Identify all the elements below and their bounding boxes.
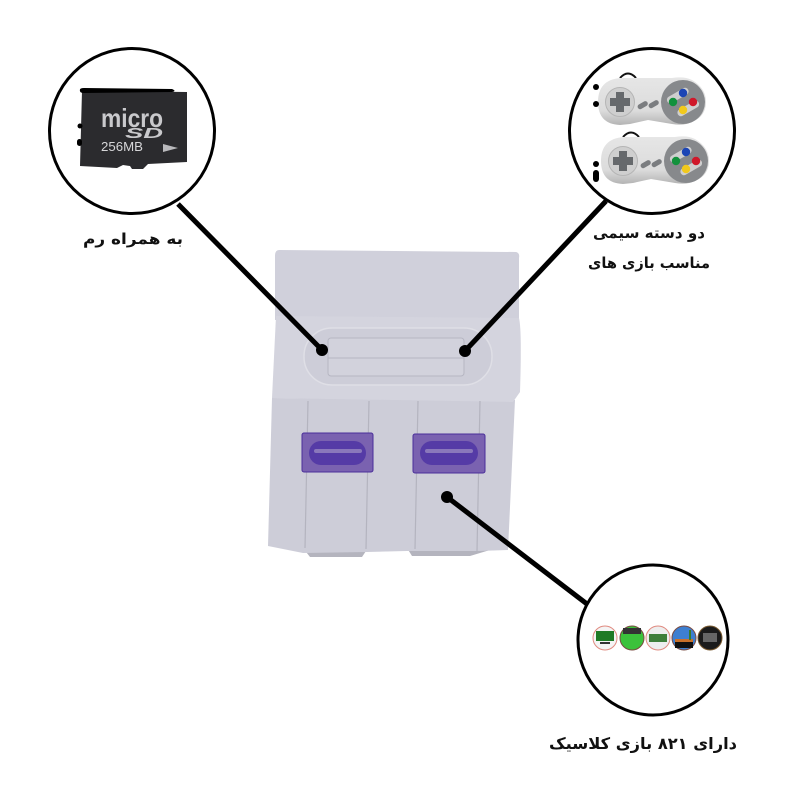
console upper body: [275, 250, 519, 320]
cartridge slot: [304, 328, 492, 385]
callout arrow: memory card to slot: [178, 204, 328, 356]
icon: game thumbnail 1: [593, 626, 617, 650]
icon: black dots: [593, 84, 599, 182]
console lower body: [268, 398, 515, 553]
label: suitable for games: مناسب بازی های: [588, 254, 710, 272]
label: with memory: به همراه رم: [83, 230, 183, 248]
label: two wired controllers: دو دسته سیمی: [593, 224, 705, 242]
icon: game thumbnail 4: [672, 626, 696, 650]
panel: games circle: [578, 565, 728, 715]
icon: game thumbnail 5: [698, 626, 722, 650]
purple switch: power: [302, 433, 373, 472]
callout arrow: controllers to slot: [459, 201, 606, 357]
panel: controllers circle: [570, 48, 734, 214]
icon: game thumbnail 2: [620, 626, 644, 650]
console feet: [303, 548, 490, 557]
icon: micro SD card: 256MB: [101, 139, 143, 154]
icon: game thumbnail 3: [646, 626, 670, 650]
icon: micro SD card: micro: [101, 104, 163, 134]
cartridge slot ledge: [272, 316, 521, 402]
purple switch: reset: [413, 434, 485, 473]
icon: upper controller: [598, 74, 706, 125]
label: 821 classic games: دارای ۸۲۱ بازی کلاسیک: [549, 734, 737, 753]
icon: lower controller: [601, 132, 709, 184]
callout arrow: games to console: [441, 491, 587, 604]
icon: micro SD card: SD: [125, 125, 163, 142]
front panel grooves: [305, 401, 480, 551]
panel: memory card circle: [50, 48, 214, 214]
panel: game console: [268, 250, 521, 557]
icon: micro SD card: [77, 88, 187, 169]
